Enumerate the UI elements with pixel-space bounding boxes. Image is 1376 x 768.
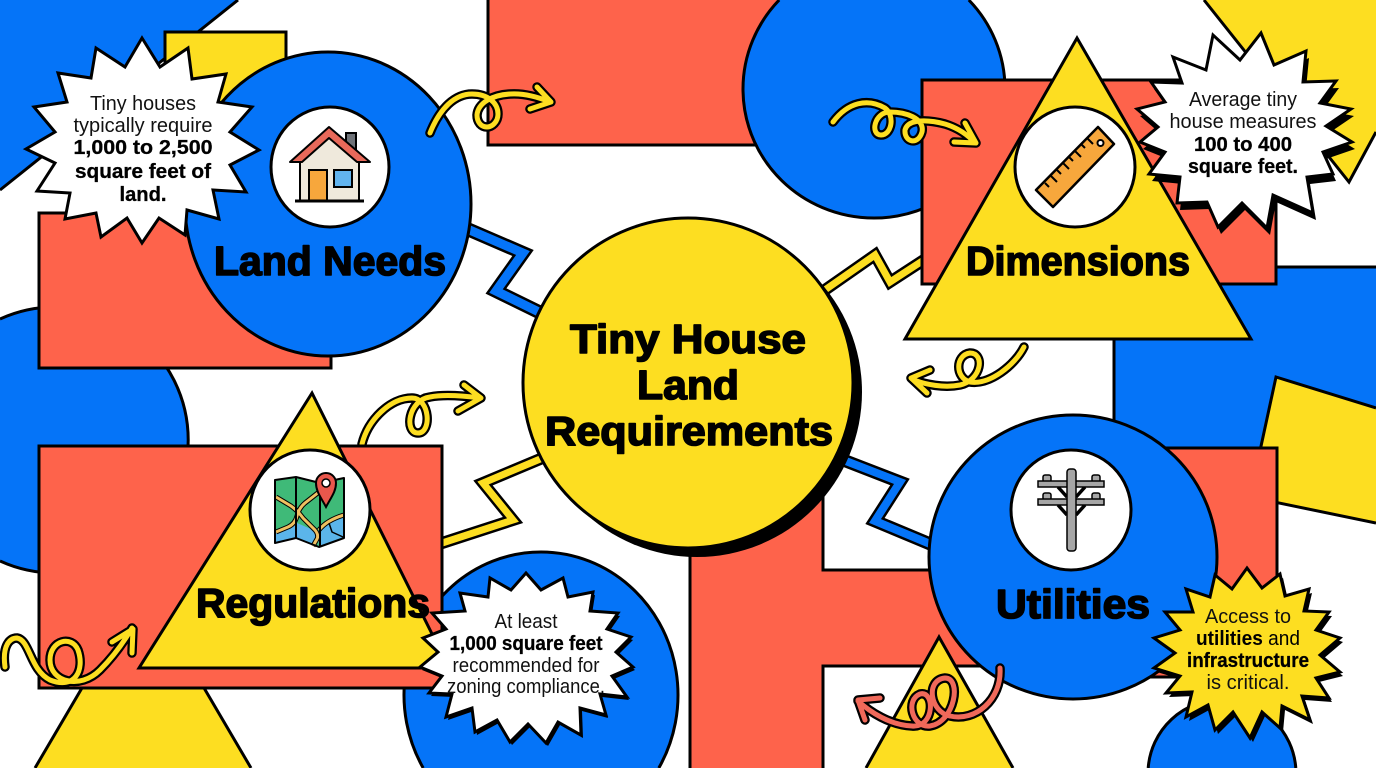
arrow: bottom left curl: [4, 628, 133, 683]
panel: land needs: [39, 52, 471, 368]
arrow: lower dimensions curl: [911, 347, 1024, 393]
callout: land needs fact: typically require: [74, 114, 212, 137]
callout: dimensions fact: Average tiny: [1189, 88, 1298, 111]
callout: regulations fact: [420, 573, 635, 746]
arrow: land needs curl: [430, 87, 551, 133]
panel: dimensions: [905, 38, 1276, 339]
heading: land needs: Land Needs: [214, 238, 446, 284]
connector: dimensions to centre: [822, 255, 930, 292]
title: Land: [637, 362, 739, 408]
arrow: regulations curl: [362, 385, 481, 444]
panel: regulations: [39, 393, 449, 688]
title: Requirements: [545, 408, 833, 454]
connector: utilities to centre: [838, 458, 935, 546]
title: [545, 316, 833, 454]
callout: regulations fact: At least: [494, 610, 558, 633]
heading: dimensions: Dimensions: [966, 238, 1190, 284]
connector: regulations to centre: [436, 457, 545, 545]
connector: land needs to centre: [465, 228, 545, 315]
callout: regulations fact: zoning compliance.: [447, 675, 605, 698]
callout: dimensions fact: house measures: [1170, 110, 1316, 133]
heading: regulations: Regulations: [196, 580, 430, 626]
callout: utilities fact: [1154, 568, 1343, 742]
arrow: red utilities curl: [858, 668, 1000, 726]
callout: land needs fact: 1,000 to 2,500: [74, 136, 212, 159]
callout: utilities fact: utilities and: [1196, 627, 1300, 650]
callout: land needs fact: land.: [120, 183, 166, 206]
callout: regulations fact: recommended for: [452, 654, 600, 677]
icon: utility pole: [1011, 450, 1131, 570]
callout: regulations fact: 1,000 square feet: [450, 632, 603, 655]
callout: dimensions fact: 100 to 400: [1194, 133, 1292, 156]
callout: dimensions fact: square feet.: [1188, 155, 1298, 178]
icon: house: [271, 107, 389, 227]
central hub: tiny house land requirements: [523, 218, 862, 557]
callout: utilities fact: is critical.: [1206, 671, 1290, 694]
callout: land needs fact: [26, 38, 259, 243]
callout: utilities fact: Access to: [1205, 605, 1291, 628]
callout: dimensions fact: [1137, 33, 1355, 235]
icon: map with pin: [250, 450, 370, 570]
callout: land needs fact: square feet of: [75, 160, 211, 183]
arrow: dimensions curl: [833, 103, 976, 143]
callout: utilities fact: infrastructure: [1187, 649, 1309, 672]
panel: utilities: [929, 415, 1277, 699]
callout: land needs fact: Tiny houses: [90, 92, 196, 115]
icon: ruler: [1015, 107, 1135, 227]
heading: utilities: Utilities: [996, 581, 1150, 627]
title: Tiny House: [570, 316, 806, 362]
